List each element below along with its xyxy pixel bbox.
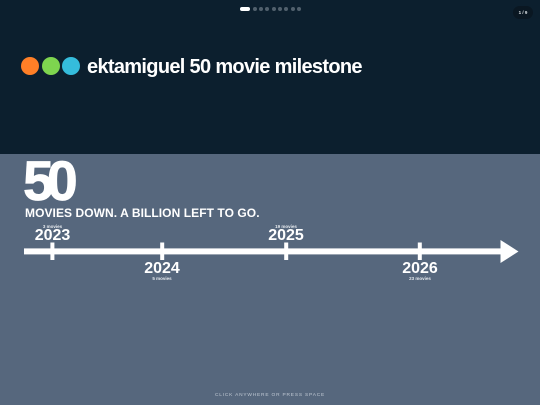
- title: ektamiguel 50 movie milestone: [87, 56, 362, 78]
- slide counter: [513, 6, 533, 19]
- milestone 2026: 23 movies: [409, 276, 431, 280]
- slide counter: 1 / 9: [519, 10, 527, 15]
- milestone 2023: 2023: [35, 227, 70, 244]
- progress dots: [240, 7, 301, 11]
- timeline arrow: [24, 240, 518, 263]
- panel: header: [0, 0, 540, 154]
- milestone 2024: 5 movies: [152, 276, 172, 280]
- big number: 50: [23, 150, 71, 212]
- milestone 2026: 2026: [402, 260, 438, 277]
- footer hint: CLICK ANYWHERE OR PRESS SPACE: [215, 392, 325, 398]
- icon: three coloured dots: [21, 57, 80, 75]
- milestone 2025: 19 movies: [275, 224, 297, 229]
- milestone 2024: 2024: [144, 260, 180, 277]
- milestone 2023: 3 movies: [43, 224, 62, 229]
- milestone 2025: 2025: [268, 227, 304, 244]
- subtitle: MOVIES DOWN. A BILLION LEFT TO GO.: [25, 206, 260, 220]
